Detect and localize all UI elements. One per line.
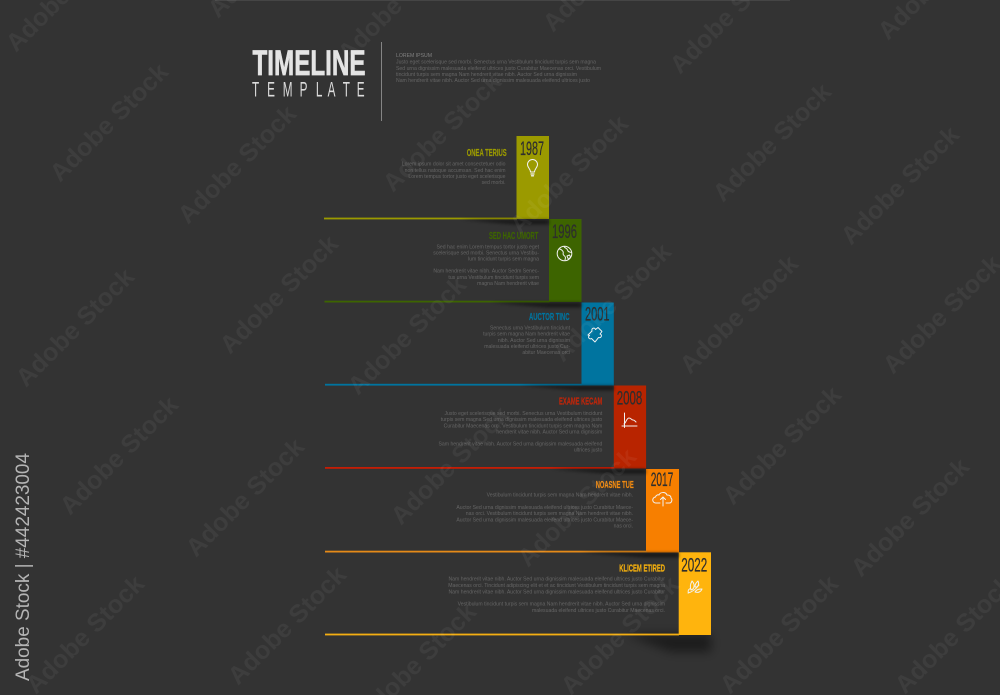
watermark pattern: Adobe Stock bbox=[180, 433, 310, 562]
body text 2022: Nam hendrerit vitae nibh. Auctor Sed urna dignissim malesuada eleifend ultrices justo Curabitur bbox=[448, 590, 665, 596]
step 2022 bbox=[325, 552, 711, 652]
watermark pattern: Adobe Stock bbox=[214, 230, 344, 359]
icon: upload cloud bbox=[653, 493, 672, 506]
step 2001 bbox=[325, 302, 614, 386]
body text 2008: Sam hendrerit vitae nibh. Auctor Sed urna dignissim malesuada eleifend bbox=[438, 442, 602, 448]
header intro text: Nam hendrerit vitae nibh. Auctor Sed urna dignissim malesuada eleifend ultrices justo bbox=[396, 78, 590, 84]
icon: light bulb bbox=[528, 160, 538, 176]
body text 1996 bbox=[433, 244, 540, 287]
body text 1987: sed morbi. bbox=[482, 180, 506, 186]
header intro text: LOREM IPSUM bbox=[396, 53, 432, 59]
body text 1996: magna Nam hendrerit vitae bbox=[477, 281, 539, 287]
body text 2017: nas orci. bbox=[614, 524, 633, 530]
body text 1987 bbox=[402, 162, 506, 186]
step 1996 bbox=[324, 219, 582, 302]
header intro text: tincidunt turpis sem magna Nam hendrerit vitae nibh. Auctor Sed urna dignissim bbox=[396, 72, 578, 78]
header: title block bbox=[252, 44, 366, 102]
watermark pattern: Adobe Stock bbox=[835, 121, 965, 250]
body text 1996: tus urna Vestibulum tincidunt turpis sem bbox=[448, 275, 539, 281]
year 1987: 1987 bbox=[520, 139, 544, 160]
body text 2017: Auctor Sed urna dignissim malesuada eleifend ultrices justo Curabitur Maece- bbox=[456, 505, 633, 511]
heading NOASNE TUE: NOASNE TUE bbox=[596, 479, 634, 491]
watermark pattern: Adobe Stock bbox=[512, 443, 642, 572]
title: TIMELINE: TIMELINE bbox=[252, 44, 366, 83]
header intro text: Justo eget scelerisque sed morbi. Senectus urna Vestibulum tincidunt turpis sem magna bbox=[396, 60, 596, 66]
heading ONEA TERIUS: ONEA TERIUS bbox=[467, 147, 507, 159]
body text 2001: abitur Maecenas orci bbox=[522, 350, 570, 356]
icon: line chart bbox=[622, 413, 637, 428]
body text 2001: Senectus urna Vestibulum tincidunt bbox=[490, 326, 571, 332]
watermark pattern: Adobe Stock bbox=[504, 110, 634, 239]
icon: puzzle piece bbox=[588, 328, 602, 342]
body text 2022: malesuada eleifend ultrices justo Curabitur Maecenas orci. bbox=[532, 608, 665, 614]
body text 2022: Maecenas orci. Tincidunt adipiscing elit et et ac tincidunt Vestibulum tincidunt turpis sem magna bbox=[448, 583, 665, 589]
side stock id text: Adobe Stock | #442423004 bbox=[12, 453, 34, 681]
watermark pattern: Adobe Stock bbox=[717, 381, 847, 510]
watermark pattern: Adobe Stock bbox=[385, 401, 515, 530]
watermark pattern: Adobe Stock bbox=[222, 561, 352, 690]
bar 1996 bbox=[549, 219, 582, 302]
body text 1987: non tellus natoque accumsan. Sed hac enim bbox=[405, 168, 506, 174]
watermark pattern: Adobe Stock bbox=[44, 58, 174, 187]
body text 2008: hendrerit vitae nibh. Auctor Sed urna dignissim bbox=[496, 430, 602, 436]
step 2008 bbox=[325, 386, 646, 469]
header divider bbox=[381, 42, 382, 121]
bar 2022 bbox=[679, 552, 711, 635]
body text 1996: scelerisque sed morbi. Senectus urna Vestibu- bbox=[433, 250, 539, 256]
bar 1987 bbox=[516, 136, 549, 219]
body text 1996: Sed hac enim Lorem tempus tortor justo eget bbox=[436, 244, 540, 250]
baseline 1996 bbox=[324, 301, 550, 302]
body text 2001 bbox=[483, 326, 571, 356]
body text 2017: nas orci. Vestibulum tincidunt turpis sem magna Nam hendrerit vitae nibh. bbox=[466, 511, 633, 517]
body text 2001: malesuada eleifend ultrices justo Cur- bbox=[484, 344, 570, 350]
year 2001: 2001 bbox=[585, 305, 610, 326]
year 2008: 2008 bbox=[617, 388, 642, 409]
watermark pattern: Adobe Stock bbox=[377, 68, 507, 197]
body text 2001: nibh. Auctor Sed urna dignissim bbox=[498, 338, 570, 344]
heading EXAME KECAM: EXAME KECAM bbox=[559, 396, 602, 408]
body text 2008 bbox=[438, 411, 603, 454]
body text 1987: Lorem tempus tortor justo eget scelerisque bbox=[408, 174, 506, 180]
body text 2022: Nam hendrerit vitae nibh. Auctor Sed urna dignissim malesuada eleifend ultrices justo Curabitur bbox=[448, 577, 665, 583]
step 1987 bbox=[324, 136, 549, 219]
body text 2022: Vestibulum tincidunt turpis sem magna Nam hendrerit vitae nibh. Auctor Sed urna dignissim bbox=[458, 602, 665, 608]
body text 2017: Vestibulum tincidunt turpis sem magna Nam hendrerit vitae nibh. bbox=[487, 493, 633, 499]
step drop shadows bbox=[460, 220, 679, 558]
subtitle: TEMPLATE: TEMPLATE bbox=[252, 78, 365, 102]
body text 2017 bbox=[456, 493, 633, 530]
heading KLICEM ETIRED: KLICEM ETIRED bbox=[619, 563, 665, 575]
bar 2008 bbox=[614, 386, 646, 468]
body text 2008: Curabitur Maecenas orci. Vestibulum tincidunt turpis sem magna Nam bbox=[444, 424, 602, 430]
body text 2008: turpis sem magna Sed urna dignissim malesuada eleifend ultrices justo bbox=[441, 417, 602, 423]
watermark pattern: Adobe Stock bbox=[547, 238, 677, 367]
baseline 2001 bbox=[325, 384, 582, 386]
watermark pattern: Adobe Stock bbox=[845, 453, 975, 582]
icon: leaves bbox=[688, 581, 702, 593]
body text 1996: Nam hendrerit vitae nibh. Auctor Sedm Senec- bbox=[433, 269, 539, 275]
baseline 2008 bbox=[325, 467, 614, 469]
body text 2017: Auctor Sed urna dignissim malesuada eleifend ultrices justo Curabitur Maece- bbox=[456, 518, 633, 524]
year 1996: 1996 bbox=[552, 222, 577, 243]
body text 2008: Justo eget scelerisque sed morbi. Senectus urna Vestibulum tincidunt bbox=[444, 411, 603, 417]
watermark pattern: Adobe Stock bbox=[707, 78, 837, 207]
heading AUCTOR TINC: AUCTOR TINC bbox=[529, 311, 570, 323]
watermark pattern: Adobe Stock bbox=[342, 271, 472, 400]
body text 1996: lum tincidunt turpis sem magna bbox=[468, 257, 539, 263]
body text 2001: turpis sem magna Nam hendrerit vitae bbox=[483, 332, 570, 338]
body text 1987: Lorem ipsum dolor sit amet consectetuer odio bbox=[402, 162, 506, 168]
baseline 1987 bbox=[324, 218, 517, 219]
baseline 2017 bbox=[325, 551, 647, 552]
heading SED HAC UMORT: SED HAC UMORT bbox=[489, 230, 539, 242]
body text 2022 bbox=[448, 577, 665, 614]
bar 2017 bbox=[646, 469, 679, 552]
year 2017: 2017 bbox=[651, 470, 673, 491]
watermark pattern: Adobe Stock bbox=[10, 263, 140, 392]
step 2017 bbox=[325, 469, 679, 552]
header intro text bbox=[396, 53, 602, 84]
header intro text: Sed urna dignissim malesuada eleifend ultrices justo Curabitur Maecenas orci. Vestibulum bbox=[396, 66, 602, 72]
year 2022: 2022 bbox=[681, 556, 707, 577]
body text 2008: ultrices justo bbox=[574, 448, 602, 454]
bar 2001 bbox=[582, 302, 614, 386]
baseline 2022 bbox=[325, 634, 679, 635]
icon: globe bbox=[557, 246, 572, 261]
watermark pattern: Adobe Stock bbox=[54, 391, 184, 520]
bottom shadow bbox=[625, 634, 711, 652]
watermark pattern: Adobe Stock bbox=[172, 100, 302, 229]
watermark pattern: Adobe Stock bbox=[674, 250, 804, 379]
